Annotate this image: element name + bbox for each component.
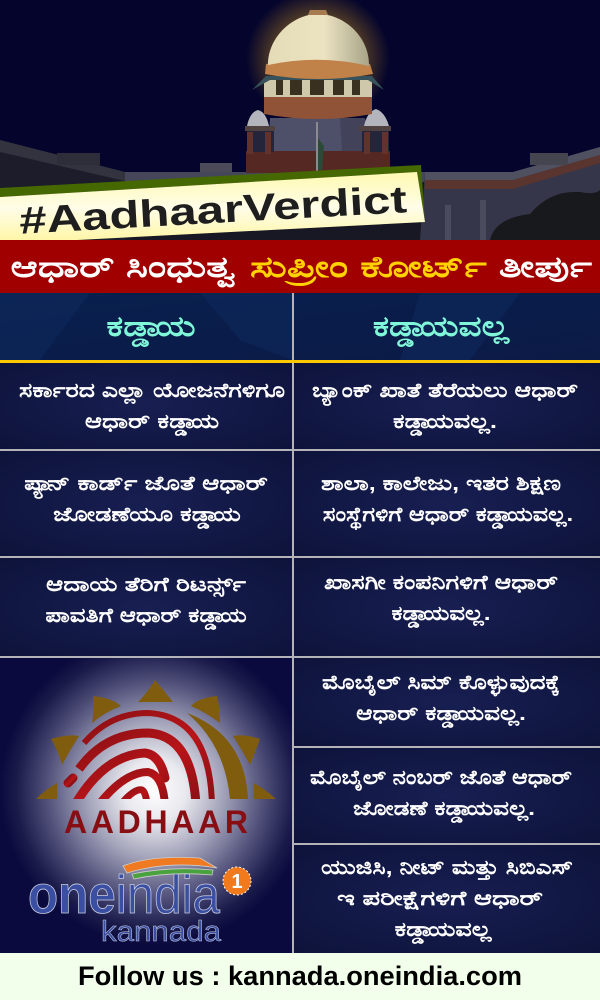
right row 6: ಇ ಪರೀಕ್ಷೆಗಳಿಗೆ ಆಧಾರ್ (337, 888, 543, 911)
right row 1 (312, 380, 578, 436)
sun petals (36, 680, 276, 799)
right row 6: ಕಡ್ಡಾಯವಲ್ಲ (395, 918, 493, 944)
right row 1: ಬ್ಯಾಂಕ್ ಖಾತೆ ತೆರೆಯಲು ಆಧಾರ್ (312, 380, 578, 407)
right row 6 (321, 857, 573, 944)
hashtag banner (0, 165, 425, 244)
red title bar (0, 240, 600, 293)
left wing of the court building (0, 140, 425, 240)
right row 5: ಜೋಡಣೆ ಕಡ್ಡಾಯವಲ್ಲ. (353, 797, 535, 824)
hashtag text: #AadhaarVerdict (18, 179, 408, 243)
left row 1: ಆಧಾರ್ ಕಡ್ಡಾಯ (85, 410, 219, 436)
left cell backgrounds (0, 362, 292, 656)
left row 1 (19, 380, 285, 436)
trees on the right (490, 190, 600, 240)
right cell backgrounds (294, 362, 600, 953)
right row 1: ಕಡ್ಡಾಯವಲ್ಲ. (393, 410, 497, 436)
flag pole (316, 122, 324, 172)
rank badge (223, 867, 251, 895)
right row 4 (322, 672, 560, 729)
left row 1: ಸರ್ಕಾರದ ಎಲ್ಲಾ ಯೋಜನೆಗಳಿಗೂ (19, 380, 285, 405)
footer: Follow us : kannada.oneindia.com (78, 961, 522, 991)
left row 3: ಆದಾಯ ತೆರಿಗೆ ರಿಟರ್ನ್ಸ್ (46, 574, 247, 598)
court tower (245, 10, 391, 173)
title: white part: ಆಧಾರ್ ಸಿಂಧುತ್ವ (10, 251, 236, 288)
footer (0, 953, 600, 1000)
comparison table (0, 293, 600, 953)
left row 2: ಜೋಡಣೆಯೂ ಕಡ್ಡಾಯ (53, 503, 241, 529)
rank badge: 1 (231, 871, 243, 893)
right row 5: ಮೊಬೈಲ್ ನಂಬರ್ ಜೊತೆ ಆಧಾರ್ (310, 767, 572, 792)
fingerprint arcs (68, 713, 212, 805)
left row 2 (24, 472, 268, 529)
right row 3: ಕಡ್ಡಾಯವಲ್ಲ. (391, 602, 491, 629)
logo panel (0, 658, 292, 953)
aadhaar wordmark: AADHAAR (64, 804, 248, 840)
dome (268, 14, 369, 66)
right row 2: ಸಂಸ್ಥೆಗಳಿಗೆ ಆಧಾರ್ ಕಡ್ಡಾಯವಲ್ಲ. (323, 503, 573, 531)
right wing of the court building (420, 147, 600, 240)
aadhaar logo (36, 680, 276, 840)
grid lines (0, 293, 600, 953)
right row 6: ಯುಜಿಸಿ, ನೀಟ್ ಮತ್ತು ಸಿಬಿಎಸ್ (321, 857, 573, 881)
right row 2 (321, 473, 573, 531)
title: yellow part: ಸುಪ್ರೀಂ ಕೋರ್ಟ್ ತೀರ್ಪು (250, 251, 593, 287)
right row 4: ಮೊಬೈಲ್ ಸಿಮ್ ಕೊಳ್ಳುವುದಕ್ಕೆ (322, 672, 560, 697)
right row 3: ಖಾಸಗೀ ಕಂಪನಿಗಳಿಗೆ ಆಧಾರ್ (324, 572, 558, 594)
left row 3 (45, 574, 247, 631)
left row 2: ಪ್ಯಾನ್ ಕಾರ್ಡ್ ಜೊತೆ ಆಧಾರ್ (24, 472, 268, 499)
header photo: supreme court at night (0, 0, 600, 240)
left row 3: ಪಾವತಿಗೆ ಆಧಾರ್ ಕಡ್ಡಾಯ (45, 604, 247, 631)
gold header rule (0, 360, 600, 363)
header: not mandatory: ಕಡ್ಡಾಯವಲ್ಲ (373, 309, 510, 348)
header: mandatory: ಕಡ್ಡಾಯ (106, 311, 196, 348)
right row 2: ಶಾಲಾ, ಕಾಲೇಜು, ಇತರ ಶಿಕ್ಷಣ (321, 473, 561, 496)
oneindia kannada logo: kannada (101, 916, 222, 948)
oneindia kannada logo (28, 857, 251, 948)
oneindia kannada logo: oneindia (28, 865, 221, 925)
column headers background (0, 293, 600, 360)
right row 4: ಆಧಾರ್ ಕಡ್ಡಾಯವಲ್ಲ. (356, 702, 526, 729)
right row 3 (324, 572, 558, 629)
right row 5 (310, 767, 572, 824)
